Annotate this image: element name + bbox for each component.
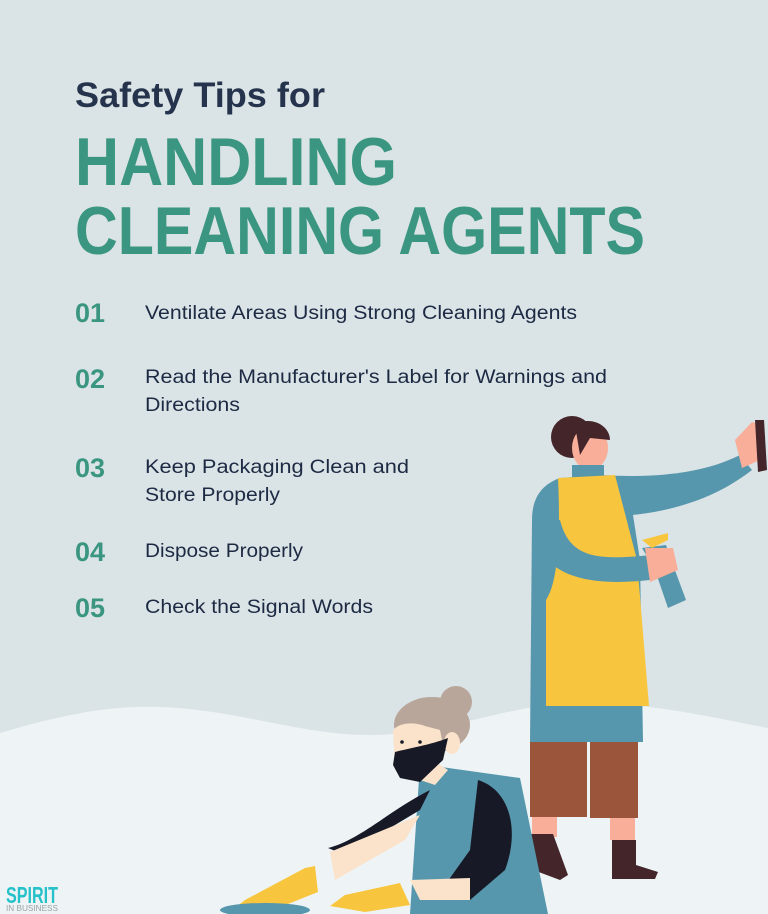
tip 02	[75, 364, 607, 416]
tip 03: Store Properly	[145, 485, 281, 506]
tip 05: 05	[75, 593, 105, 623]
list of tips	[75, 298, 607, 623]
tip 02: 02	[75, 364, 105, 394]
logo: SPIRIT	[6, 882, 58, 908]
tip 01: Ventilate Areas Using Strong Cleaning Agents	[145, 303, 577, 324]
tip 02: Read the Manufacturer's Label for Warnings and	[145, 367, 607, 388]
tip 03: 03	[75, 453, 105, 483]
logo	[6, 882, 58, 913]
title: Safety Tips for	[75, 76, 325, 115]
title: HANDLING	[75, 124, 397, 200]
tip 05	[75, 593, 373, 623]
floor wave	[0, 703, 768, 914]
tip 03: Keep Packaging Clean and	[145, 457, 409, 478]
tip 03	[75, 453, 409, 506]
illustration: kneeling woman with mask and gloves	[220, 686, 548, 914]
tip 04: 04	[75, 537, 105, 567]
tip 01: 01	[75, 298, 105, 328]
title	[75, 76, 645, 269]
logo: IN BUSINESS	[6, 904, 58, 913]
illustration: standing woman with spray	[528, 416, 767, 880]
tip 01	[75, 298, 577, 328]
tip 04: Dispose Properly	[145, 541, 304, 562]
tip 05: Check the Signal Words	[145, 597, 373, 618]
tip 02: Directions	[145, 395, 240, 416]
title: CLEANING AGENTS	[75, 193, 645, 269]
tip 04	[75, 537, 304, 567]
